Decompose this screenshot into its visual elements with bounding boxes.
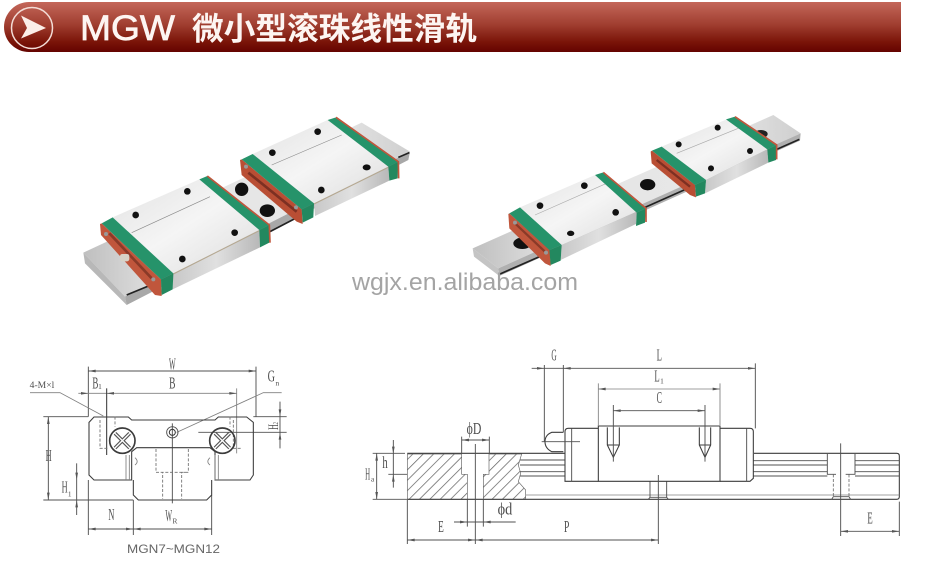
dimension labels	[365, 345, 873, 536]
caption: MGN7~MGN12	[127, 542, 220, 556]
dimension labels: N	[108, 505, 115, 524]
title text: MGW	[80, 9, 175, 48]
title text: Chinese: 微小型滚珠线性滑轨	[192, 4, 477, 50]
dimension labels: R	[173, 517, 178, 526]
dimension labels: H	[46, 446, 52, 465]
dimension labels: P	[564, 517, 569, 536]
dimension labels: 1	[660, 377, 664, 386]
dimension labels: H2	[264, 422, 282, 430]
dimension labels: C	[657, 388, 662, 407]
block 1	[100, 176, 270, 296]
block 2	[240, 117, 399, 224]
product photo: rail with two wide blocks	[83, 117, 410, 305]
dimension labels: L	[654, 367, 660, 386]
carriage block	[542, 426, 753, 481]
grease nipple	[167, 427, 178, 438]
dimension labels: n	[275, 379, 279, 388]
dimension labels: W	[169, 355, 176, 374]
rail	[473, 115, 801, 276]
dimension labels: G	[551, 345, 557, 364]
dimension labels	[30, 355, 282, 526]
block and rail outline	[89, 417, 253, 500]
rail	[83, 123, 410, 305]
hatched rail section	[407, 454, 526, 499]
dimension labels: W	[165, 506, 172, 525]
dimension labels: 1	[68, 489, 72, 498]
dimension labels: B	[92, 373, 98, 392]
dimension labels: E	[867, 509, 873, 528]
title banner	[4, 2, 901, 52]
dimension labels: H	[62, 478, 68, 497]
ball circuits	[110, 428, 235, 453]
drawing: side view with rail section	[365, 345, 899, 544]
block 2	[651, 117, 777, 197]
dimension labels: 1	[98, 382, 102, 391]
drawing: cross-section end view	[30, 355, 287, 535]
product photo: rail with two narrow blocks	[473, 115, 801, 276]
dimension labels: ϕD	[467, 419, 481, 438]
icon: play arrow in circle	[12, 8, 52, 48]
dimension labels: ϕd	[498, 500, 513, 519]
dimension labels: h	[382, 453, 388, 472]
dimension labels: G	[268, 367, 275, 386]
dimension lines	[373, 363, 899, 544]
dimension labels: E	[438, 517, 444, 536]
dimension labels: a	[371, 474, 375, 483]
dimension labels: B	[169, 373, 175, 392]
dimension labels: L	[657, 346, 662, 365]
dimension labels: H	[365, 465, 370, 484]
block 1	[508, 172, 646, 266]
watermark: wgjx.en.alibaba.com	[351, 269, 578, 296]
dimension labels: 4-M×l	[30, 381, 55, 391]
rail outline	[407, 453, 899, 499]
dimension lines	[30, 367, 287, 535]
